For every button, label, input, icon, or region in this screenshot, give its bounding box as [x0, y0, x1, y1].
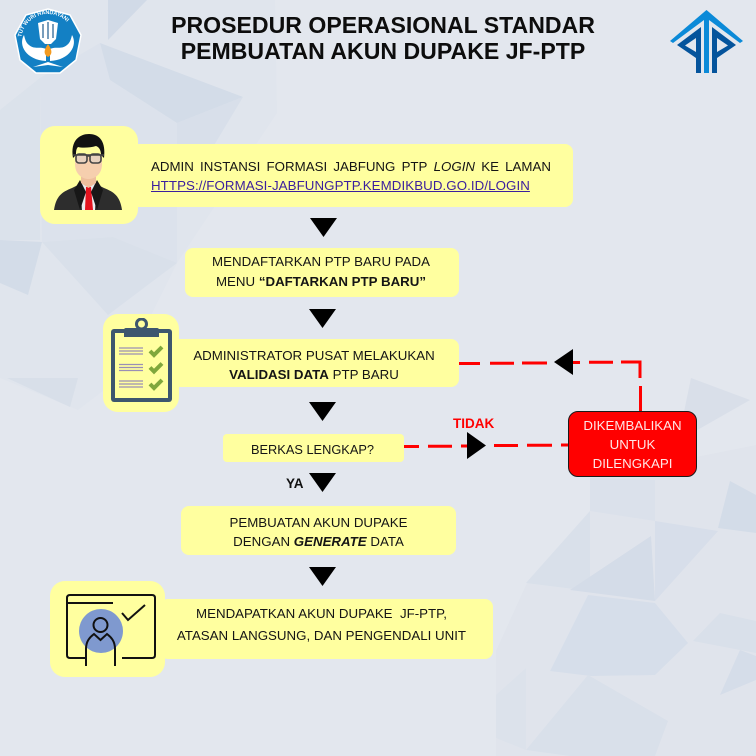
- step 2 text: MENU “DAFTARKAN PTP BARU”: [216, 274, 426, 289]
- arrow down 2: [309, 309, 336, 328]
- step 5 text: DENGAN GENERATE DATA: [233, 534, 404, 548]
- icon: PTP logo: [670, 10, 743, 73]
- step 3 text: ADMINISTRATOR PUSAT MELAKUKAN: [193, 348, 435, 362]
- step 2 text: [212, 254, 430, 289]
- title: PEMBUATAN AKUN DUPAKE JF-PTP: [181, 38, 585, 64]
- callout text: [583, 418, 682, 471]
- icon: ministry logo: TUT WURI HANDAYANI: [18, 10, 70, 36]
- step 3 text: [193, 348, 435, 382]
- step 6 text: ATASAN LANGSUNG, DAN PENGENDALI UNIT: [177, 628, 466, 643]
- step 2: register: [185, 248, 459, 297]
- step 6 box: [160, 599, 493, 659]
- step 5 text: [229, 514, 408, 548]
- step 4: decision: [223, 434, 404, 462]
- step 1 text: ADMIN INSTANSI FORMASI JABFUNG PTP LOGIN KE LAMAN: [151, 158, 551, 174]
- step 5 text: PEMBUATAN AKUN DUPAKE: [229, 514, 408, 530]
- title: PROSEDUR OPERASIONAL STANDAR: [171, 12, 595, 38]
- icon: ministry logo: [14, 8, 82, 74]
- label: ya: YA: [286, 476, 304, 491]
- icon: clipboard: [111, 318, 172, 402]
- step 6 text: MENDAPATKAN AKUN DUPAKE JF-PTP,: [196, 606, 447, 621]
- callout text: UNTUK: [610, 437, 655, 452]
- step 1: admin login: [40, 126, 573, 224]
- step 6 text: [176, 606, 466, 643]
- step 3: validation: [103, 314, 459, 412]
- arrow down 1: [310, 218, 337, 237]
- callout text: DILENGKAPI: [593, 456, 672, 471]
- label: tidak: TIDAK: [453, 416, 494, 431]
- icon: account window: [66, 594, 156, 666]
- step 2 text: MENDAFTARKAN PTP BARU PADA: [212, 254, 430, 269]
- step 6 icon panel: [50, 581, 165, 677]
- step 1 box: [130, 144, 573, 207]
- arrow down 3: [309, 402, 336, 421]
- step 6: receive account: [50, 581, 493, 677]
- step 5: generate account: [181, 506, 456, 555]
- callout text: DIKEMBALIKAN: [583, 418, 682, 433]
- title: [171, 12, 595, 64]
- step 1 icon panel: [40, 126, 138, 224]
- step 3 icon panel: [103, 314, 179, 412]
- callout: returned for completion: [568, 411, 697, 477]
- step 3 box: [170, 339, 459, 387]
- arrow down 4: [309, 473, 336, 492]
- step 1 text: HTTPS://FORMASI-JABFUNGPTP.KEMDIKBUD.GO.ID/LOGIN: [151, 178, 530, 192]
- step 1 text: [151, 158, 551, 192]
- step 3 text: VALIDASI DATA PTP BARU: [229, 366, 399, 382]
- decision text: BERKAS LENGKAP?: [251, 442, 374, 457]
- arrow down 5: [309, 567, 336, 586]
- icon: businessman: [54, 134, 122, 210]
